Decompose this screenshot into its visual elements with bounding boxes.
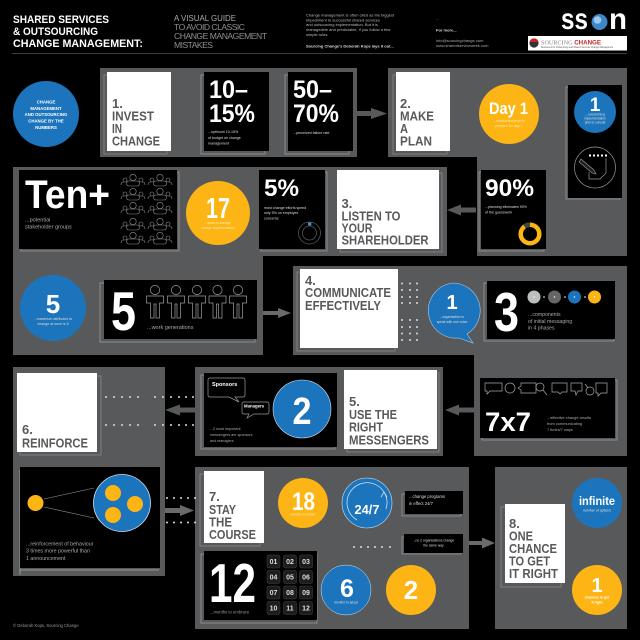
card: reinforcement: 1 announcement — [26, 556, 66, 562]
card: invest: CHANGE — [112, 134, 160, 148]
card: 5 work generations: 5 — [111, 280, 136, 342]
card: stay the course: 7. — [209, 489, 220, 504]
card: 5%: 5% — [264, 175, 299, 202]
logo: sson: ss — [561, 3, 588, 36]
circle: 1 plan: plan to consult — [585, 120, 605, 124]
circle: 2 — [386, 565, 436, 615]
icons: speech bubbles — [485, 383, 607, 396]
arrow: 6 to 7 — [165, 505, 194, 516]
card: 24/7 programs — [405, 491, 463, 514]
icon: people groups — [121, 174, 172, 244]
intro text: and outsourcing implementation. But it is — [306, 22, 378, 27]
card: one chance: 8. — [509, 516, 520, 531]
intro circle: CHANGE BY THE — [28, 118, 64, 124]
card: 10-15%: ...optimum 10-15% — [208, 130, 239, 134]
intro circle: CHANGE — [37, 100, 55, 104]
donut — [298, 222, 320, 244]
card: 3 components — [487, 281, 615, 343]
card: sponsors and managers: ...2 most important — [210, 427, 241, 431]
card: 12 months: 02 — [286, 559, 294, 566]
card: right messengers: MESSENGERS — [349, 432, 429, 448]
card: 50-70% — [288, 72, 353, 151]
subtitle: TO AVOID CLASSIC — [174, 22, 245, 32]
card: 10-15%: 10– — [209, 76, 248, 104]
card: one chance — [505, 504, 565, 583]
dots: panel 6 to 5 — [105, 396, 194, 426]
circle: day 1: ...conducted prior to — [493, 119, 525, 123]
intro circle: AND OUTSOURCING — [25, 112, 68, 117]
card: 12 months: 11 — [286, 606, 294, 612]
circle: 6: 6 — [340, 575, 354, 603]
card: 3 components: in 4 phases — [528, 326, 555, 332]
circle: 18 — [278, 478, 328, 528]
title: CHANGE MANAGEMENT: — [13, 38, 143, 50]
card: 12 months: 01 — [270, 559, 277, 566]
card: 90%: 90% — [485, 175, 534, 202]
card: 12 months: 09 — [302, 590, 310, 597]
card: 90%: of the guesswork — [485, 210, 512, 214]
card: 5 work generations — [104, 280, 257, 342]
card: 50-70%: 50– — [293, 76, 332, 104]
panel: 8 one chance — [495, 467, 627, 629]
card: make a plan — [396, 72, 450, 151]
card: 7x7: ...effective change results — [547, 415, 591, 420]
arrow: 7 to 8 — [469, 538, 495, 548]
panel: 6 reinforce — [13, 367, 165, 576]
card: 3 components: 3 — [494, 281, 519, 343]
speech bubble: 1 voice: ...organisation to — [440, 315, 464, 319]
card: 7x7: from communicating — [547, 421, 582, 426]
speech bubble: 1 voice — [428, 283, 480, 343]
card: 3 components: of initial messaging — [528, 319, 572, 325]
card: right messengers: RIGHT — [349, 420, 383, 434]
card: 12 months: 04 — [270, 574, 277, 582]
panel: 7 stay the course — [195, 467, 469, 629]
card: 50-70%: ...perceived failure rate — [293, 131, 330, 135]
contact text: info@sourcingchange.com — [436, 38, 484, 43]
card: listen — [337, 170, 439, 249]
card: 7x7: 7x7 — [485, 407, 531, 437]
intro circle: MANAGEMENT — [30, 106, 62, 111]
circle: 18: 18 — [292, 488, 315, 516]
card: 10-15%: management — [208, 142, 229, 146]
title: SHARED SERVICES — [13, 14, 109, 26]
icon: pencil and page — [574, 147, 616, 188]
panel: 1 invest in change — [100, 68, 357, 157]
card: reinforce: 6. — [22, 422, 33, 437]
card: 24/7 programs: ...change programs — [409, 494, 445, 499]
intro circle — [13, 81, 79, 147]
card: 90% — [481, 170, 546, 249]
card: 3 components: ...components — [528, 312, 561, 318]
card: sponsors and managers: and managers — [210, 439, 234, 443]
card: reinforce: REINFORCE — [22, 436, 88, 450]
grid: months — [267, 555, 312, 614]
panel: 5 messengers — [195, 367, 443, 456]
card: stay the course: COURSE — [209, 527, 256, 542]
card: 12 months: ...months to embrace — [210, 610, 250, 614]
circle: 1 chance: 1 — [591, 575, 603, 597]
card: right messengers: 5. — [349, 394, 360, 409]
dots — [401, 282, 418, 341]
card: 12 months: 03 — [302, 559, 310, 566]
card: invest: IN — [112, 121, 122, 136]
circle: 2: 2 — [292, 391, 312, 433]
card: reinforcement: ...reinforcement of behaviour — [26, 542, 94, 548]
contact text: For more... — [436, 28, 457, 32]
logo: sson: n — [609, 3, 627, 36]
card: ten+: stakeholder groups — [25, 224, 72, 230]
title — [13, 14, 143, 50]
card: right messengers — [344, 370, 437, 449]
card: ten+: Ten+ — [25, 173, 110, 217]
intro circle: NUMBERS — [35, 125, 57, 130]
card: 24/7 programs: in effect 24/7 — [409, 501, 434, 506]
intro text: simple rules. — [306, 32, 328, 37]
subtitle: CHANGE MANAGEMENT — [174, 31, 268, 41]
title: & OUTSOURCING — [13, 26, 98, 38]
circle: 17: change implementation — [202, 226, 235, 230]
circle: 1 plan: 1 — [590, 95, 601, 116]
card: communicate: 4. — [305, 273, 316, 288]
card: listen: YOUR — [342, 220, 373, 236]
card: communicate: EFFECTIVELY — [305, 298, 381, 313]
circle: 1 chance: it right — [592, 600, 603, 604]
circle: 5 attributes — [20, 275, 86, 341]
card: one chance: TO GET — [509, 554, 550, 568]
card: plan icons — [568, 85, 622, 198]
circle: 1 chance: chances to get — [585, 596, 610, 600]
card: listen: LISTEN TO — [342, 208, 400, 224]
circle: infinite: number of options — [583, 508, 611, 512]
card: reinforcement — [20, 467, 160, 568]
card: stay the course — [204, 471, 264, 543]
card: 5 work generations: ...work generations — [147, 325, 194, 331]
panel: 4 communicate — [293, 266, 627, 456]
card: 12 months: 12 — [302, 606, 310, 612]
card: make a plan: MAKE — [400, 108, 434, 124]
circle: 2: 2 — [404, 575, 418, 605]
arrow: 5 to 6 — [165, 404, 195, 416]
card: same way: ...no 2 organisations change — [413, 538, 454, 542]
intro text: manageable and predictable, if you follow a few — [306, 27, 390, 32]
card: make a plan: 2. — [400, 96, 411, 111]
panel: 2 make a plan — [388, 68, 627, 256]
card: ten+: ...potential — [25, 218, 50, 224]
subtitle: MISTAKES — [174, 40, 213, 50]
card: right messengers: USE THE — [349, 407, 397, 422]
donut — [521, 225, 539, 243]
card: 10-15%: of budget on change — [208, 136, 241, 140]
card: make a plan: A — [400, 121, 409, 136]
circle: 18: months to embed — [291, 512, 316, 516]
circle: 17 — [186, 181, 250, 245]
logo: sourcing change — [528, 36, 627, 50]
card: one chance: ONE — [509, 528, 533, 544]
card: invest — [107, 72, 171, 151]
subtitle: A VISUAL GUIDE — [174, 13, 236, 23]
speech bubble: sponsors: Sponsors — [212, 382, 237, 388]
logo: sourcing change: Resources for Outsourcing and Shared Services Change Management — [541, 46, 613, 49]
circle: infinite — [572, 478, 622, 528]
card: 12 months: 05 — [286, 574, 294, 582]
logo: sourcing change: SOURCING CHANGE — [541, 40, 601, 46]
intro text — [306, 12, 395, 48]
card: stay the course: STAY — [209, 502, 236, 517]
circle: 2 — [273, 380, 331, 438]
card: 7x7 — [480, 378, 615, 438]
dots — [353, 546, 391, 548]
circle: 24/7 — [342, 478, 392, 528]
circle: 5 attributes: change at once is 5 — [37, 322, 69, 326]
circle: 5 attributes: ...maximum attributes to — [34, 317, 72, 321]
circle: 24/7: 24/7 — [354, 503, 380, 517]
card: communicate — [300, 269, 398, 348]
circle: 6: months to adopt — [334, 600, 358, 604]
intro text: Sourcing Change's Deborah Kops lays it out... — [306, 44, 394, 48]
dots: panel 6 to 7 — [166, 497, 196, 524]
card: same way — [404, 534, 463, 553]
card: 12 months: 08 — [286, 590, 294, 597]
contact text: www.sharedserviceweek.com — [436, 43, 489, 48]
circle: 5 attributes: 5 — [46, 289, 60, 319]
intro text: Change management is often cited as the biggest — [306, 12, 395, 18]
circle: 17: 17 — [206, 193, 230, 225]
speech bubble: 1 voice: speak with one voice — [437, 320, 467, 324]
card: one chance: CHANCE — [509, 541, 557, 556]
card: 10-15%: 15% — [209, 100, 255, 128]
circle: 1 plan: implementation — [584, 116, 606, 120]
card: sponsors and managers: messengers are sponsors — [210, 433, 253, 437]
subtitle — [174, 13, 268, 50]
circle: 1 plan — [574, 91, 616, 133]
circle: 1 chance — [572, 565, 622, 615]
intro text: impediment to successful shared services — [306, 18, 380, 22]
card: invest: INVEST — [112, 108, 154, 124]
card: stay the course: THE — [209, 514, 232, 530]
arrow: 1 to 2 — [356, 108, 387, 119]
contact text — [436, 16, 489, 48]
card: listen: 3. — [342, 196, 352, 211]
panel: 3 listen — [13, 167, 447, 355]
arrow: 4 to 5 — [445, 404, 474, 416]
circle: day 1: Day 1 — [489, 99, 528, 118]
card: 5%: concerns — [264, 216, 279, 220]
card: reinforcement: 3 times more powerful than — [26, 548, 90, 554]
card: sponsors and managers — [204, 373, 337, 447]
card: same way: the same way — [423, 544, 444, 548]
card: 12 months: 06 — [302, 574, 310, 582]
circle: 1 plan: ...overarching — [585, 112, 605, 116]
circle: infinite: infinite — [579, 494, 615, 508]
card: 12 months: 12 — [209, 552, 256, 614]
card: communicate: COMMUNICATE — [305, 285, 391, 300]
card: 50-70%: 70% — [293, 100, 339, 128]
card: reinforce — [17, 373, 97, 452]
card: ten+ — [19, 170, 177, 249]
card: 7x7: 7 times/7 ways — [547, 427, 573, 432]
card: 10-15% — [204, 72, 269, 151]
arrow: 2 to 3 — [447, 204, 476, 216]
card: 90%: ...planning eliminates 90% — [485, 205, 528, 209]
card: one chance: IT RIGHT — [509, 566, 558, 581]
circle: day 1 — [479, 84, 539, 144]
card: listen: SHAREHOLDER — [342, 232, 429, 248]
arrow: 3 to 4 — [263, 308, 291, 318]
circle: 6 — [321, 565, 371, 615]
footer credit: © Deborah Kops, Sourcing Change — [13, 623, 79, 628]
card: 5%: only 5% on employee — [264, 211, 298, 215]
card: make a plan: PLAN — [400, 134, 432, 148]
contact text: ... — [436, 16, 439, 21]
card: 5%: most change efforts spend — [264, 206, 306, 210]
card: 12 months — [204, 551, 317, 620]
speech bubble: 1 voice: 1 — [446, 292, 458, 314]
circle: 17: ...years in average — [205, 221, 231, 225]
circle: day 1: prepare for day 1 — [495, 124, 523, 128]
card: invest: 1. — [112, 96, 123, 111]
speech bubble: managers: Managers — [244, 404, 265, 408]
card: 12 months: 07 — [270, 590, 277, 597]
logo: sson — [561, 3, 627, 36]
card: 5% — [259, 170, 325, 249]
card: 12 months: 10 — [270, 606, 277, 612]
